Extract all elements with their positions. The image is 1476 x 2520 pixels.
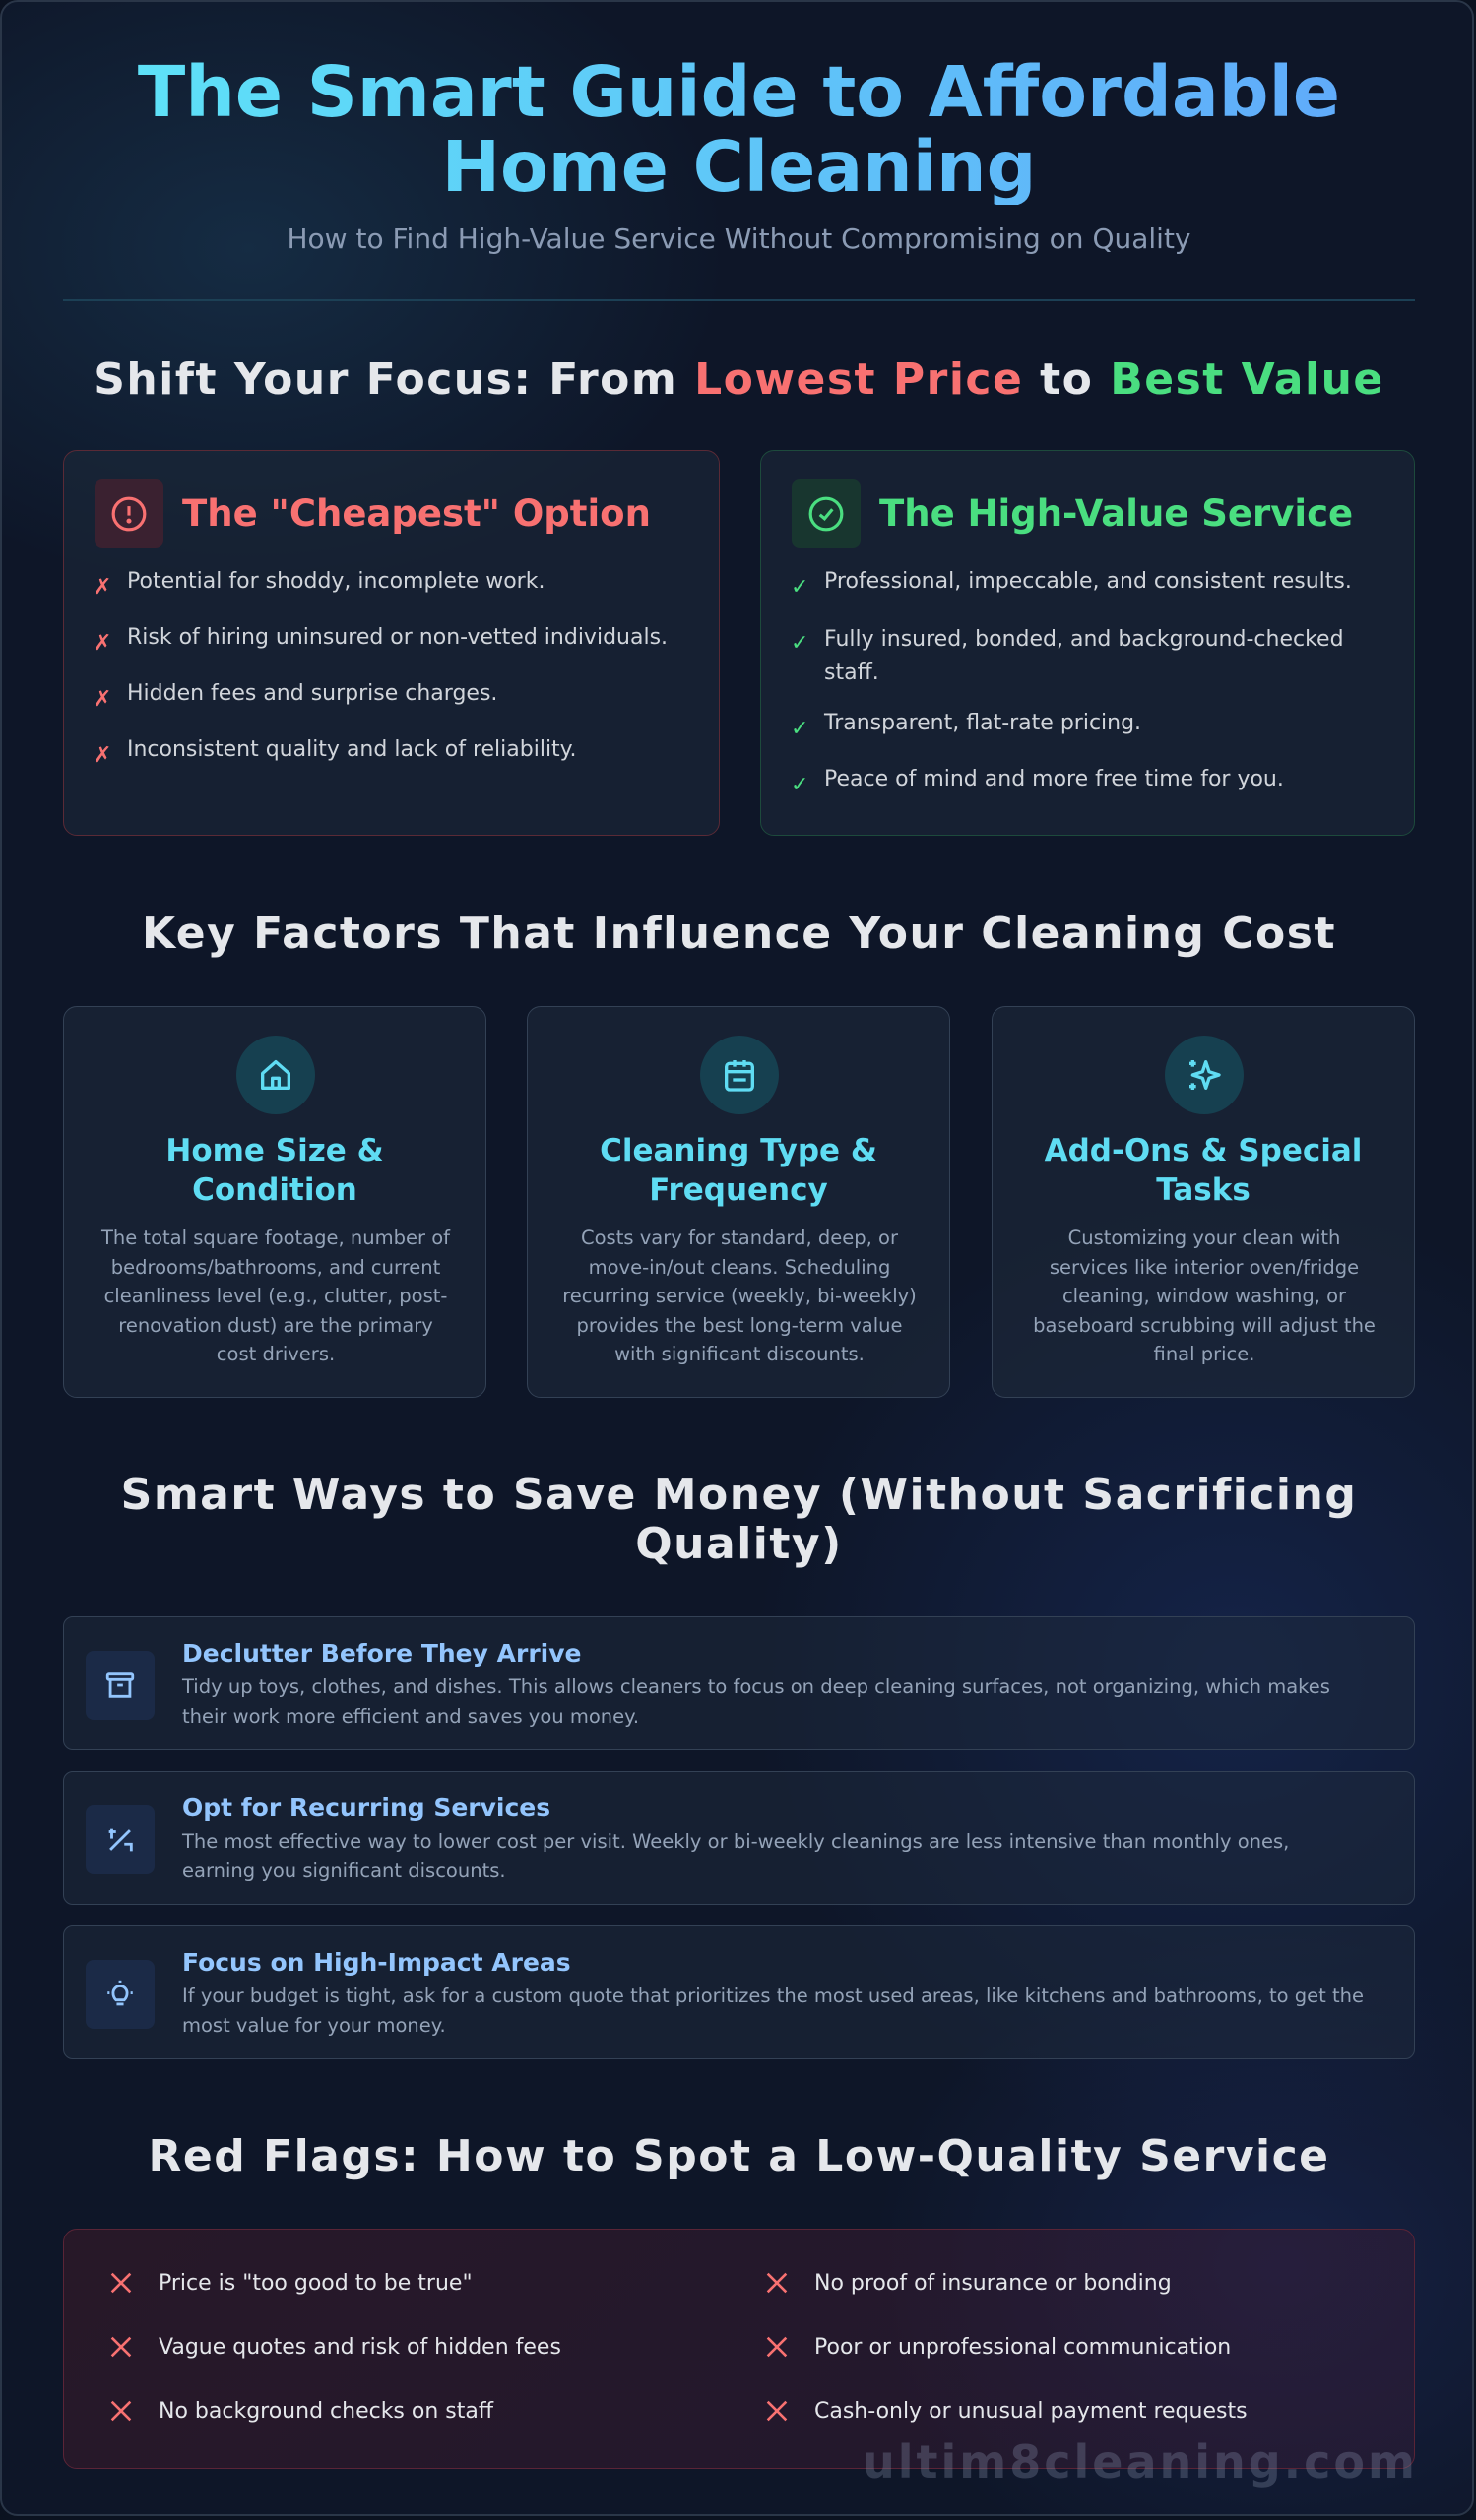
- panel: red flags: Price is "too good to be true": [159, 2271, 473, 2296]
- icon: lightbulb: [86, 1960, 155, 2029]
- card: cleaning type: provides the best long-term value: [576, 1314, 903, 1337]
- card: add-ons: final price.: [1154, 1343, 1254, 1365]
- card: add-ons: Customizing your clean with: [1068, 1227, 1340, 1249]
- card: cleaning type: Cleaning Type &: [600, 1133, 877, 1168]
- list: Hidden fees and surprise charges.: [127, 681, 497, 706]
- card: cleaning type: move-in/out cleans. Scheduling: [589, 1256, 890, 1279]
- heading: red flags: Red Flags: How to Spot a Low-Quality Service: [148, 2131, 1330, 2181]
- tip: high-impact: [63, 1925, 1415, 2059]
- list: ✓: [791, 773, 808, 797]
- panel title: The High-Value Service: [879, 492, 1353, 535]
- list: ✗: [94, 575, 111, 599]
- icon: house: [236, 1036, 315, 1114]
- heading: smart ways: Smart Ways to Save Money (Without Sacrificing Quality): [121, 1470, 1357, 1569]
- icon: archive: [86, 1651, 155, 1720]
- card: cleaning type: Costs vary for standard, deep, or: [581, 1227, 898, 1249]
- tip: declutter: [63, 1616, 1415, 1750]
- panel: red flags: No proof of insurance or bonding: [814, 2271, 1172, 2296]
- list: Fully insured, bonded, and background-checked staff.: [824, 627, 1344, 685]
- title: [2, 55, 1476, 205]
- list: ✓: [791, 717, 808, 741]
- card: add-ons: [992, 1006, 1415, 1398]
- heading: key factors: Key Factors That Influence Your Cleaning Cost: [142, 909, 1336, 959]
- card: cleaning type: [527, 1006, 950, 1398]
- list: Risk of hiring uninsured or non-vetted individuals.: [127, 625, 668, 650]
- tip: high-impact: Focus on High-Impact Areas: [182, 1948, 571, 1977]
- panel: red flags: [63, 2229, 1415, 2469]
- panel: red flags: No background checks on staff: [159, 2399, 493, 2424]
- tip: declutter: Tidy up toys, clothes, and dishes. This allows cleaners to focus on deep cleaning surfaces, not organizing, which makes their work more efficient and saves you money.: [182, 1675, 1330, 1728]
- card: add-ons: Add-Ons & Special: [1045, 1133, 1362, 1168]
- list: ✓: [791, 631, 808, 656]
- tip: recurring: The most effective way to lower cost per visit. Weekly or bi-weekly cleanings are less intensive than monthly ones, earning you significant discounts.: [182, 1830, 1289, 1882]
- card: add-ons: services like interior oven/fridge: [1050, 1256, 1359, 1279]
- heading: shift your focus: Shift Your Focus: From Lowest Price to Best Value: [94, 354, 1384, 405]
- card: cleaning type: recurring service (weekly, bi-weekly): [562, 1285, 917, 1307]
- list: ✗: [94, 631, 111, 656]
- title: Home Cleaning: [442, 126, 1036, 208]
- panel: red flags: Cash-only or unusual payment requests: [814, 2399, 1248, 2424]
- panel title: The "Cheapest" Option: [182, 492, 651, 535]
- panel: cheapest option: [63, 450, 720, 836]
- panel: red flags: Poor or unprofessional communication: [814, 2335, 1231, 2360]
- icon: calendar: [700, 1036, 779, 1114]
- card: add-ons: cleaning, window washing, or: [1062, 1285, 1346, 1307]
- list: Inconsistent quality and lack of reliability.: [127, 737, 577, 762]
- card: home size: cost drivers.: [217, 1343, 335, 1365]
- list: [94, 569, 668, 768]
- list: ✗: [94, 687, 111, 712]
- card: home size: renovation dust) are the primary: [118, 1314, 433, 1337]
- card: cleaning type: Frequency: [649, 1172, 828, 1208]
- tip: recurring: [63, 1771, 1415, 1905]
- card: cleaning type: with significant discounts.: [614, 1343, 865, 1365]
- list: Professional, impeccable, and consistent results.: [824, 569, 1352, 594]
- list: Transparent, flat-rate pricing.: [824, 711, 1141, 735]
- title: The Smart Guide to Affordable: [138, 51, 1340, 133]
- icon: sparkles: [1165, 1036, 1244, 1114]
- icon: percent: [86, 1805, 155, 1874]
- icon: check: [792, 479, 861, 548]
- panel: red flags: Vague quotes and risk of hidden fees: [159, 2335, 561, 2360]
- subtitle: How to Find High-Value Service Without Compromising on Quality: [287, 222, 1191, 255]
- list: Potential for shoddy, incomplete work.: [127, 569, 545, 594]
- card: home size: Home Size &: [165, 1133, 384, 1168]
- list: Peace of mind and more free time for you.: [824, 767, 1284, 791]
- icon: alert: [95, 479, 163, 548]
- panel: high-value service: [760, 450, 1415, 836]
- card: add-ons: baseboard scrubbing will adjust the: [1033, 1314, 1376, 1337]
- card: home size: Condition: [192, 1172, 357, 1208]
- watermark: ultim8cleaning.com: [863, 2435, 1418, 2488]
- card: home size: [63, 1006, 486, 1398]
- list: ✓: [791, 575, 808, 599]
- tip: high-impact: If your budget is tight, ask for a custom quote that prioritizes the most used areas, like kitchens and bathrooms, to get the most value for your money.: [182, 1984, 1364, 2037]
- list: ✗: [94, 743, 111, 768]
- list: [791, 569, 1352, 797]
- card: home size: bedrooms/bathrooms, and current: [111, 1256, 440, 1279]
- tip: declutter: Declutter Before They Arrive: [182, 1639, 581, 1668]
- card: home size: The total square footage, number of: [101, 1227, 450, 1249]
- card: home size: cleanliness level (e.g., clutter, post-: [104, 1285, 447, 1307]
- tip: recurring: Opt for Recurring Services: [182, 1794, 550, 1822]
- card: add-ons: Tasks: [1156, 1172, 1251, 1208]
